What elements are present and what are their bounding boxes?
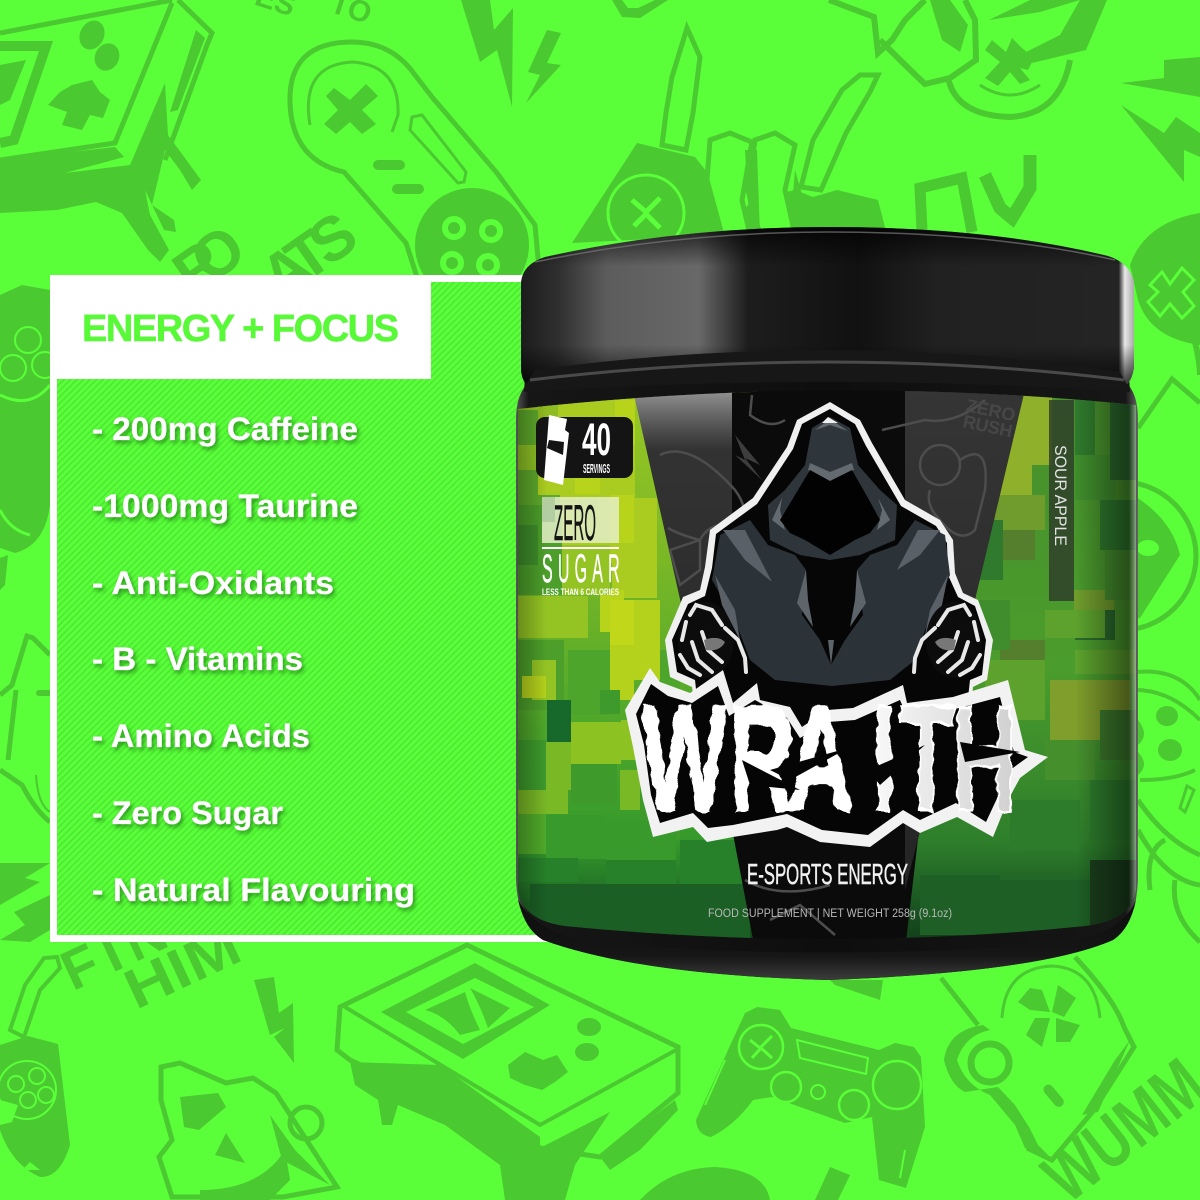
net weight: FOOD SUPPLEMENT | NET WEIGHT 258g (9.1oz) <box>708 908 952 920</box>
shoulder highlights <box>715 530 948 640</box>
doodle: FINISH HIM lettering: HIM <box>114 913 250 1021</box>
doodle: top lettering fragments <box>251 0 376 31</box>
doodle: left edge lightning <box>0 863 50 942</box>
flavour strip <box>1049 400 1074 601</box>
robe <box>712 520 950 686</box>
servings badge <box>536 414 633 485</box>
doodle: lightning bolts top <box>461 0 561 107</box>
doodle: left edge pad <box>0 285 58 590</box>
doodle: SNES style controller top centre <box>290 42 540 302</box>
edge shading <box>516 385 1138 955</box>
hand right <box>914 602 982 678</box>
doodle: skeleton hand on controller top centre <box>572 28 887 251</box>
panel: energy and focus ingredients <box>50 275 557 942</box>
servings badge: 40 <box>582 414 611 465</box>
zero sugar badge: ZERO <box>554 495 596 551</box>
wordmark: WRAITH <box>642 675 1017 843</box>
doodle: right edge curve <box>1138 379 1200 428</box>
item: - Natural Flavouring <box>92 872 415 908</box>
doodle: pixel lettering above panel: ATS <box>248 199 370 313</box>
doodle: big controller bottom right <box>941 957 1134 1160</box>
pixel camouflage right <box>900 385 1140 955</box>
flavour strip: SOUR APPLE <box>1051 445 1070 546</box>
doodle: right edge controller <box>1130 213 1200 375</box>
hood rim <box>772 419 890 530</box>
doodle: lightning bottom <box>254 977 294 1063</box>
item: - Zero Sugar <box>92 795 283 831</box>
jar neck <box>524 345 1130 392</box>
doodle: fragment top centre <box>612 0 668 18</box>
face void <box>780 470 880 555</box>
product jar <box>516 227 1140 980</box>
doodle: creature and crossed button top right <box>829 0 1107 117</box>
doodle: right edge button pad <box>1136 672 1200 812</box>
black silhouette <box>672 409 986 725</box>
pixel camouflage left <box>516 385 756 955</box>
hand left <box>678 602 746 678</box>
jar label <box>516 385 1140 955</box>
zero sugar badge: LESS THAN 6 CALORIES <box>542 587 619 597</box>
doodle: dual shock controller bottom centre right <box>696 1007 925 1188</box>
panel border <box>50 275 550 942</box>
zero sugar badge <box>542 495 625 597</box>
ingredient list <box>92 411 415 908</box>
jar foot shading <box>518 900 1136 980</box>
servings badge: SERVINGS <box>583 461 610 476</box>
doodle: right edge ring with wedge <box>1048 482 1196 630</box>
jagged slashes <box>742 742 1020 790</box>
item: - Anti-Oxidants <box>92 565 334 601</box>
spiky white outline <box>625 668 1048 847</box>
item: - B - Vitamins <box>92 641 303 677</box>
doodle: right edge curves lower <box>1138 800 1200 942</box>
item: -1000mg Taurine <box>92 488 358 524</box>
doodle: left edge beak <box>0 636 52 822</box>
hood <box>768 417 897 560</box>
dark V panel: ZERO <box>964 395 1017 425</box>
doodle: pixel letters OV <box>920 155 1030 232</box>
doodle: lightning top right <box>1121 57 1200 182</box>
doodle: pixel lettering above panel <box>161 199 370 313</box>
dark V panel <box>632 385 1026 950</box>
item: - 200mg Caffeine <box>92 411 358 447</box>
icon: shaker <box>544 415 569 485</box>
heading tab: ENERGY + FOCUS <box>82 308 399 350</box>
jar lid <box>521 227 1134 384</box>
reaper mascot <box>665 402 993 725</box>
spiky black edge <box>636 684 1028 835</box>
doodle: skull and fist bottom <box>159 1063 337 1200</box>
doodle: handheld console bottom centre <box>337 945 678 1200</box>
doodle: dripping console top left <box>0 0 212 262</box>
striped panel fill <box>57 282 557 935</box>
dark V panel: RUSH <box>961 411 1014 441</box>
doodle: skeleton hand controller bottom left <box>0 957 70 1177</box>
doodle: pixel lettering above panel: RO <box>161 212 258 309</box>
item: - Amino Acids <box>92 718 310 754</box>
white outline <box>665 402 993 720</box>
tagline: E-SPORTS ENERGY <box>747 859 908 891</box>
WRAITH logo <box>625 668 1048 847</box>
doodle: fragments bottom centre <box>640 980 883 1200</box>
centre fold lines <box>797 570 866 665</box>
jar body <box>516 382 1138 980</box>
heading tab <box>50 275 431 379</box>
doodle: FINISH HIM lettering: FINISH <box>51 848 286 1002</box>
zero sugar badge: SUGAR <box>542 547 625 591</box>
